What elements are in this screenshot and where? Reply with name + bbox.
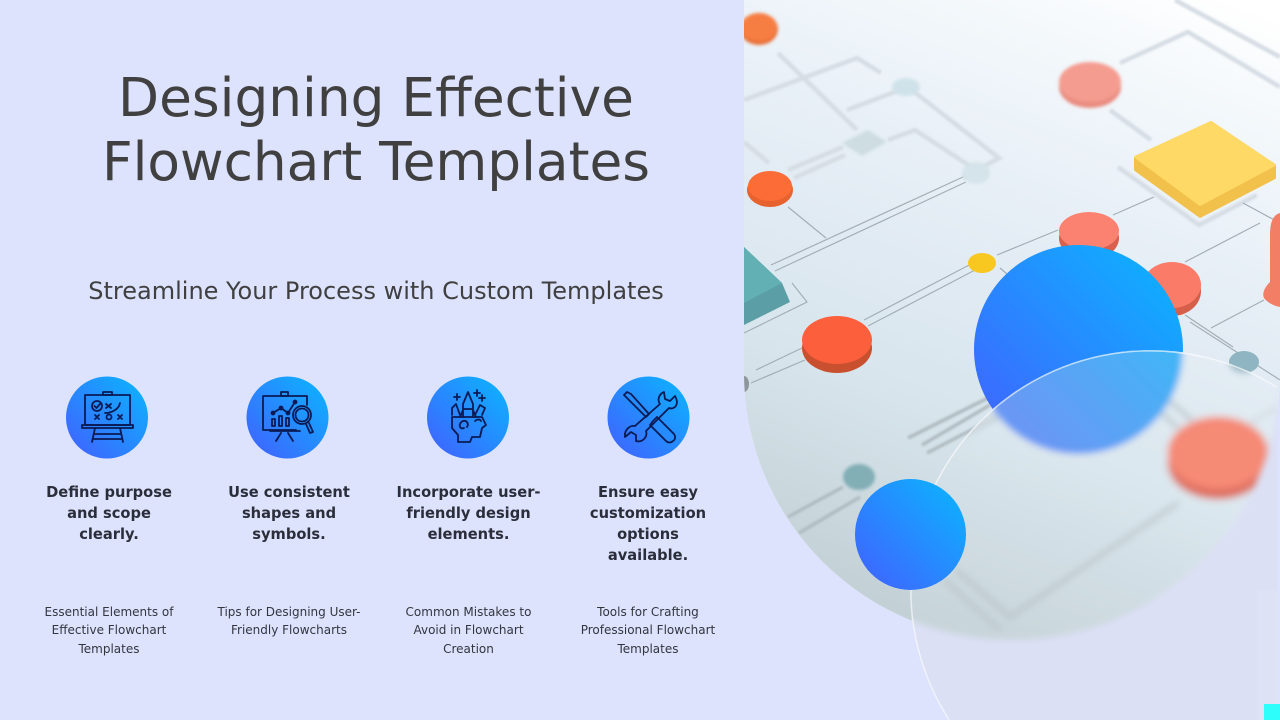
column 3 heading: friendly design <box>406 505 531 522</box>
column 4 heading: customization <box>590 505 706 522</box>
subtitle: Streamline Your Process with Custom Templates <box>88 277 664 305</box>
title: Designing Effective <box>118 67 634 129</box>
column 4 description <box>581 604 715 656</box>
column 3 heading: elements. <box>428 526 509 543</box>
icon: strategy board <box>66 376 148 458</box>
column 3 description <box>406 604 531 656</box>
cyan corner square <box>1264 704 1280 720</box>
column 2 heading: Use consistent <box>228 484 350 501</box>
column 4 heading: Ensure easy <box>598 484 698 501</box>
column 2 heading <box>228 484 350 543</box>
icon: chart board with magnifier <box>246 376 328 458</box>
column 4 heading: options <box>617 526 679 543</box>
column 3 heading <box>396 484 541 543</box>
column 3 heading: Incorporate user- <box>396 484 541 501</box>
column 3 description: Creation <box>443 642 494 656</box>
column 1 description <box>45 604 174 656</box>
column 1 heading <box>46 484 172 543</box>
column 1 heading: and scope <box>67 505 151 522</box>
column 1 description: Essential Elements of <box>45 604 173 618</box>
small blue circle <box>855 479 966 590</box>
column 4 heading <box>590 484 706 564</box>
column 1 description: Effective Flowchart <box>52 623 166 637</box>
column 3 description: Common Mistakes to <box>406 604 531 618</box>
column 2 description: Tips for Designing User- <box>217 604 361 618</box>
column 2 heading: symbols. <box>252 526 326 543</box>
column 1 description: Templates <box>78 642 140 656</box>
column 1 heading: Define purpose <box>46 484 172 501</box>
icon: crossed wrench and screwdriver <box>608 376 690 458</box>
icon: creative head <box>427 376 509 458</box>
column 2 description: Friendly Flowcharts <box>231 623 347 637</box>
frosted glass panel <box>910 350 1277 720</box>
photo panel: flowchart illustration <box>744 0 1280 620</box>
large blue circle <box>974 245 1183 454</box>
column 4 description: Templates <box>617 642 678 656</box>
title <box>102 67 650 193</box>
column 2 heading: shapes and <box>242 505 336 522</box>
column 1 heading: clearly. <box>79 526 139 543</box>
title: Flowchart Templates <box>102 131 650 193</box>
column 4 heading: available. <box>608 547 688 564</box>
column 4 description: Tools for Crafting <box>597 604 699 618</box>
column 4 description: Professional Flowchart <box>581 623 715 637</box>
column 2 description <box>217 604 361 637</box>
column 3 description: Avoid in Flowchart <box>413 623 524 637</box>
